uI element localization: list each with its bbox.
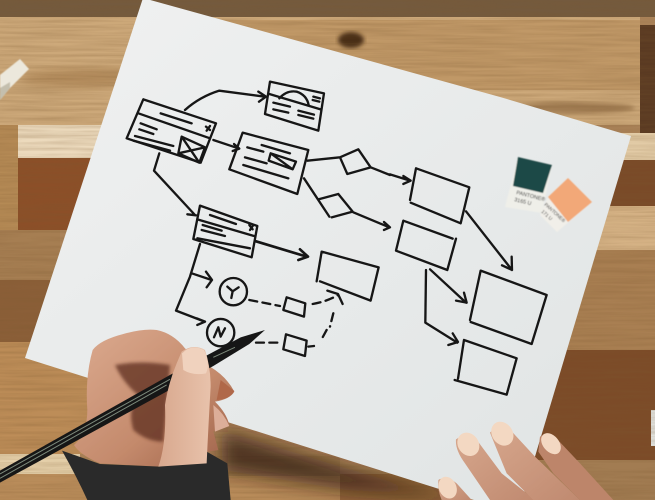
dashed connectors <box>249 295 338 347</box>
green swatch card: PANTONE® <box>516 189 546 203</box>
top header wireframe box <box>265 82 324 131</box>
flowchart right half <box>390 168 547 395</box>
arrow to middle box <box>213 140 239 151</box>
long diagonal arrow <box>466 211 512 270</box>
right hand fingertips at bottom <box>435 417 613 500</box>
upper right box <box>410 168 469 223</box>
small box top <box>283 297 305 317</box>
large right box <box>470 271 547 344</box>
lower right box <box>455 340 517 395</box>
small box bottom <box>283 334 307 356</box>
nails <box>453 428 484 460</box>
arrow into box <box>390 174 411 184</box>
finger three <box>538 435 613 500</box>
arrow to lower box <box>154 153 196 215</box>
green swatch card: 3165 U <box>514 197 532 207</box>
arrow to header box <box>185 91 266 110</box>
dashed arrowhead <box>327 291 343 304</box>
knit sleeve cuff <box>62 451 231 500</box>
thumb <box>158 347 211 467</box>
second right box <box>396 221 456 270</box>
finger two <box>490 427 580 500</box>
orange swatch card: PANTONE® <box>543 201 567 224</box>
pantone swatches <box>505 157 592 232</box>
branch lines to Y and N <box>176 244 212 325</box>
main wireframe box <box>127 99 216 163</box>
fingertip nails <box>217 380 234 400</box>
arrow to empty box <box>256 241 308 260</box>
pen <box>0 330 265 483</box>
flowchart left half <box>127 82 390 356</box>
middle wireframe box <box>229 133 308 194</box>
lower wireframe box <box>193 206 257 257</box>
palm and fingers <box>74 330 234 467</box>
left hand holding pen <box>0 330 265 500</box>
shadow inside grip <box>115 362 170 442</box>
lower diamond decision <box>304 178 390 230</box>
paper shadow on desk <box>222 430 470 500</box>
green swatch card <box>505 157 552 213</box>
marker cap on desk <box>0 59 29 100</box>
branch arrows <box>425 269 467 345</box>
circle Y <box>220 278 247 305</box>
orange swatch card <box>540 178 592 232</box>
thumb nail <box>182 347 208 374</box>
circle N <box>207 319 234 346</box>
finger one <box>456 436 535 500</box>
thumb tip <box>438 478 472 500</box>
top diamond decision <box>307 149 390 175</box>
orange swatch card: 171 U <box>540 209 554 222</box>
empty box <box>317 252 379 301</box>
